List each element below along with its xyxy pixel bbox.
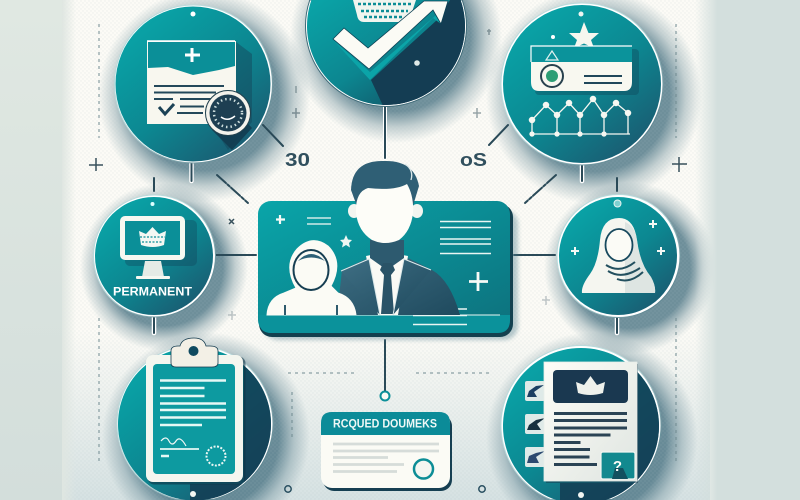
panel: middle left circle with monitor	[94, 195, 216, 317]
dotted guide lines	[99, 24, 676, 464]
icon: document page	[544, 362, 638, 483]
plus markers	[89, 29, 687, 320]
text lines	[554, 414, 627, 464]
icon: man with suit	[337, 161, 460, 315]
panel: bottom right circle with document	[501, 346, 665, 500]
icon: star	[569, 22, 599, 48]
icon: ring badge	[414, 460, 433, 478]
panel: central id card	[258, 161, 518, 340]
icon: card sparkles	[276, 215, 488, 291]
small ring markers	[285, 486, 485, 492]
icon: small star	[414, 60, 420, 66]
icon: crown emblem	[576, 376, 605, 395]
circle shadows	[80, 0, 716, 500]
icon: signature	[161, 438, 186, 446]
icon: checklist tiles	[525, 381, 545, 467]
icon: id card	[531, 35, 639, 95]
chart: line chart	[529, 96, 631, 136]
icon: monitor	[120, 216, 197, 279]
icon: seal	[206, 446, 226, 466]
panel: required documents card	[321, 412, 452, 491]
panel: top right circle with card and chart	[501, 3, 663, 165]
icon: crown	[353, 0, 416, 22]
text lines	[333, 444, 439, 472]
icon: small diamond	[190, 12, 196, 16]
panel: bottom left circle with clipboard	[117, 338, 275, 500]
icon: woman silhouette	[267, 241, 356, 315]
icon: gauge seal	[206, 90, 252, 150]
panel: top left circle with certificate	[114, 5, 272, 163]
text: PERMANENT: PERMANENT	[113, 284, 193, 298]
connector end ring	[380, 392, 390, 400]
text lines on clipboard	[160, 380, 226, 456]
panel: middle right circle with headscarf figure	[557, 194, 680, 318]
text lines on card	[413, 222, 491, 324]
connector lines	[154, 97, 617, 392]
text: card title: RCQUED DOUMEKS	[333, 418, 437, 430]
panel: top center circle with check	[306, 0, 470, 110]
icon: document	[147, 41, 236, 124]
icon: sparkles	[571, 220, 665, 255]
icon: headscarf figure	[582, 218, 655, 293]
icon: question badge: ?	[613, 458, 622, 475]
label: 30: 30	[285, 150, 310, 170]
icon: clipboard	[146, 338, 246, 484]
label: 05: oS	[460, 150, 487, 170]
icon: check arrow	[333, 1, 448, 80]
